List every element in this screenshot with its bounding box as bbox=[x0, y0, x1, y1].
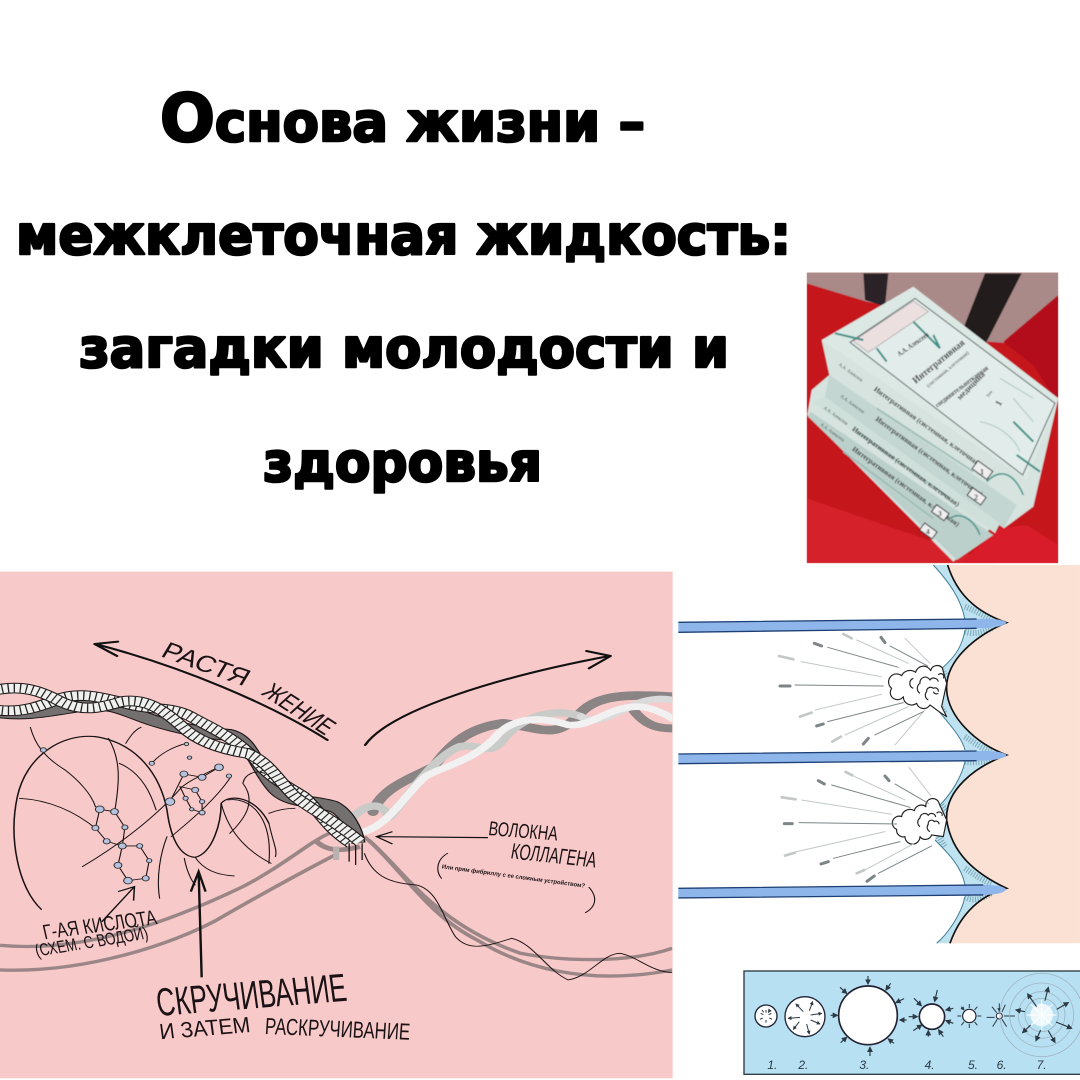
book cover title: (системная, клеточная) bbox=[925, 349, 971, 389]
stage 1 circle bbox=[755, 1005, 777, 1027]
label: collagen fibres: КОЛЛАГЕНА bbox=[509, 840, 599, 873]
spine labels: А.А. Алексеев bbox=[819, 423, 846, 444]
title: здоровья bbox=[263, 431, 542, 494]
label: stretching: ЖЕНИЕ bbox=[256, 678, 342, 740]
stage numbers: 5. bbox=[968, 1058, 978, 1072]
stretched fibre: right braid bbox=[353, 696, 672, 832]
arrow: stretching left bbox=[95, 642, 327, 740]
spine labels: Интегративная (системная, клеточная) bbox=[850, 424, 962, 509]
volume numbers bbox=[920, 461, 993, 539]
stage numbers: 6. bbox=[997, 1058, 1007, 1072]
stage numbers: 3. bbox=[859, 1058, 869, 1072]
spine labels: А.А. Алексеев bbox=[837, 363, 864, 384]
gray collagen curves bbox=[0, 833, 672, 976]
stage numbers: 4. bbox=[925, 1058, 935, 1072]
book cover title: медицина bbox=[955, 369, 987, 402]
label: collagen fibres: ВОЛОКНА bbox=[487, 817, 560, 845]
stage 7 burst bbox=[1000, 973, 1080, 1057]
panel: collagen and hyaluronic acid drawing bbox=[0, 572, 673, 1078]
label: twisting: И ЗАТЕМ bbox=[158, 1013, 252, 1044]
book cover title: Интегративная bbox=[911, 337, 968, 386]
photo background: chair back bbox=[807, 272, 1058, 343]
label: hyaluronic acid: (СХЕМ. С ВОДОЙ) bbox=[32, 922, 150, 961]
spine labels: Интегративная (системная, клеточная) bbox=[850, 444, 962, 529]
note: fibril in brackets bbox=[438, 853, 595, 913]
label: hyaluronic acid: Г-АЯ КИСЛОТА bbox=[41, 906, 159, 944]
stage numbers: 7. bbox=[1037, 1058, 1047, 1072]
volume numbers: 2 bbox=[974, 493, 978, 502]
label: twisting bbox=[153, 965, 411, 1045]
arrow: twisting bbox=[191, 872, 206, 977]
explosion cloud 2 bbox=[892, 799, 947, 844]
spine labels: Интегративная (системная, клеточная) bbox=[872, 384, 984, 469]
peach tissue bbox=[947, 565, 1080, 943]
explosion cloud 1 bbox=[889, 666, 947, 717]
note: fibril in brackets: Или прям фибриллу с ее сложным устройством? bbox=[441, 863, 586, 889]
stage 2 circle bbox=[785, 997, 825, 1037]
stage 3 circle bbox=[831, 976, 907, 1056]
arrow: to hyaluronic acid bbox=[102, 887, 134, 922]
spine labels bbox=[819, 363, 985, 529]
book cover title: Том bbox=[985, 389, 993, 398]
spine labels: А.А. Алексеев bbox=[839, 394, 866, 416]
volume numbers: 1 bbox=[980, 467, 984, 476]
book cover title bbox=[898, 333, 1002, 408]
title bbox=[16, 80, 791, 494]
title: Основа жизни – bbox=[160, 80, 645, 157]
arrow: stretching right bbox=[365, 651, 611, 745]
panel: stages of cell pulsation bbox=[744, 971, 1080, 1074]
stage numbers bbox=[767, 1058, 1047, 1072]
book cover title: А.А. Алексеев bbox=[895, 330, 931, 358]
twisted fibre: left braid bbox=[0, 688, 362, 865]
label: twisting: СКРУЧИВАНИЕ bbox=[153, 965, 349, 1025]
label: hyaluronic acid bbox=[32, 906, 159, 961]
label: collagen fibres bbox=[487, 817, 599, 873]
book stack sides bbox=[807, 340, 1058, 562]
stage 5 circle bbox=[957, 1004, 981, 1028]
hyaluronic acid molecule bbox=[40, 742, 232, 884]
panel: cell layers diagram bbox=[678, 565, 1080, 943]
particle rays 2 bbox=[782, 767, 932, 881]
spine labels: А.А. Алексеев bbox=[822, 406, 849, 427]
arrow: to collagen bbox=[376, 832, 488, 844]
label: twisting: РАСКРУЧИВАНИЕ bbox=[264, 1012, 411, 1045]
volume numbers: 3 bbox=[938, 509, 942, 518]
stage numbers: 2. bbox=[797, 1058, 808, 1072]
stage numbers: 1. bbox=[767, 1058, 777, 1072]
book cover title: соединительнотканная bbox=[933, 363, 990, 409]
stage 4 circle bbox=[909, 990, 953, 1037]
blue fibres bbox=[678, 619, 1007, 898]
hyaluronic acid chains bbox=[14, 727, 295, 909]
title: межклеточная жидкость: bbox=[16, 204, 791, 267]
photo: stack of books bbox=[807, 272, 1058, 563]
volume numbers: 4 bbox=[926, 527, 930, 536]
blue membrane band bbox=[933, 565, 1007, 943]
stage 6 circle bbox=[987, 1003, 1015, 1027]
label: stretching bbox=[157, 636, 342, 740]
spine labels: Интегративная (системная, клеточная) bbox=[874, 414, 985, 499]
title: загадки молодости и bbox=[79, 317, 729, 380]
book cover title: 1 bbox=[994, 399, 1005, 408]
label: stretching: РАСТЯ bbox=[157, 636, 256, 691]
top book cover bbox=[821, 286, 1058, 400]
particle rays 1 bbox=[779, 634, 930, 745]
wavy fibril line bbox=[364, 853, 672, 980]
